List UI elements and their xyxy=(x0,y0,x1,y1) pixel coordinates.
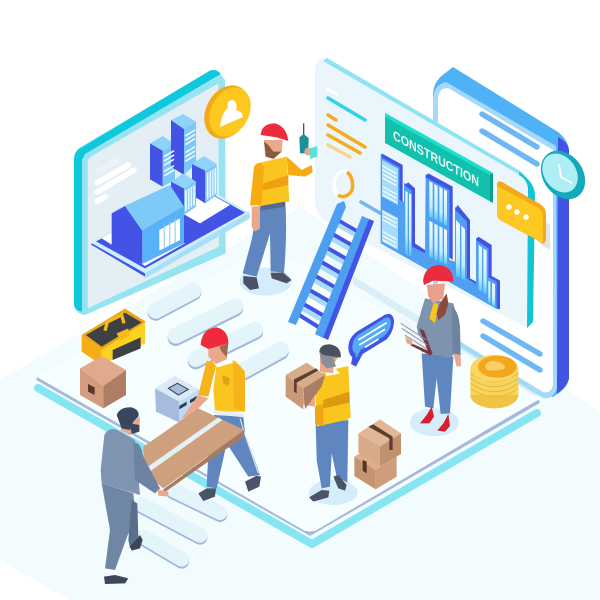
head and helmet xyxy=(261,123,288,159)
chat box yellow xyxy=(497,181,550,250)
box held xyxy=(286,363,325,409)
box on toolbox side xyxy=(80,356,126,408)
worker carrying box xyxy=(286,344,358,505)
clipboard xyxy=(398,316,433,356)
house xyxy=(110,185,184,264)
man in grey xyxy=(101,407,168,584)
panel: left building screen xyxy=(74,70,250,315)
woman in helmet xyxy=(398,265,461,436)
city model on platform xyxy=(91,114,250,278)
speech bubble xyxy=(348,314,394,367)
floor pills upper xyxy=(156,291,281,373)
worker with drill xyxy=(240,123,317,296)
head and helmet xyxy=(201,327,228,364)
coin stack xyxy=(470,355,518,408)
text lines on back screen xyxy=(482,114,540,370)
board xyxy=(143,408,244,493)
stacked cardboard boxes xyxy=(354,419,401,489)
icon: yellow location coin xyxy=(195,77,259,147)
platform xyxy=(37,245,539,544)
banner: construction: CONSTRUCTION xyxy=(393,127,479,190)
panel: back white screen xyxy=(433,67,569,398)
background floor xyxy=(0,207,600,600)
ladder xyxy=(288,201,374,340)
screen text lines xyxy=(97,160,134,201)
panel: front chart screen xyxy=(315,58,550,328)
worker carrying board xyxy=(101,327,261,584)
clock xyxy=(532,142,594,208)
list lines xyxy=(328,89,380,213)
donut chart xyxy=(334,171,353,197)
drill xyxy=(299,123,317,159)
chart skyline xyxy=(381,153,500,309)
floor pills lower xyxy=(142,490,220,561)
toolbox xyxy=(80,309,146,408)
printer box xyxy=(155,376,199,423)
